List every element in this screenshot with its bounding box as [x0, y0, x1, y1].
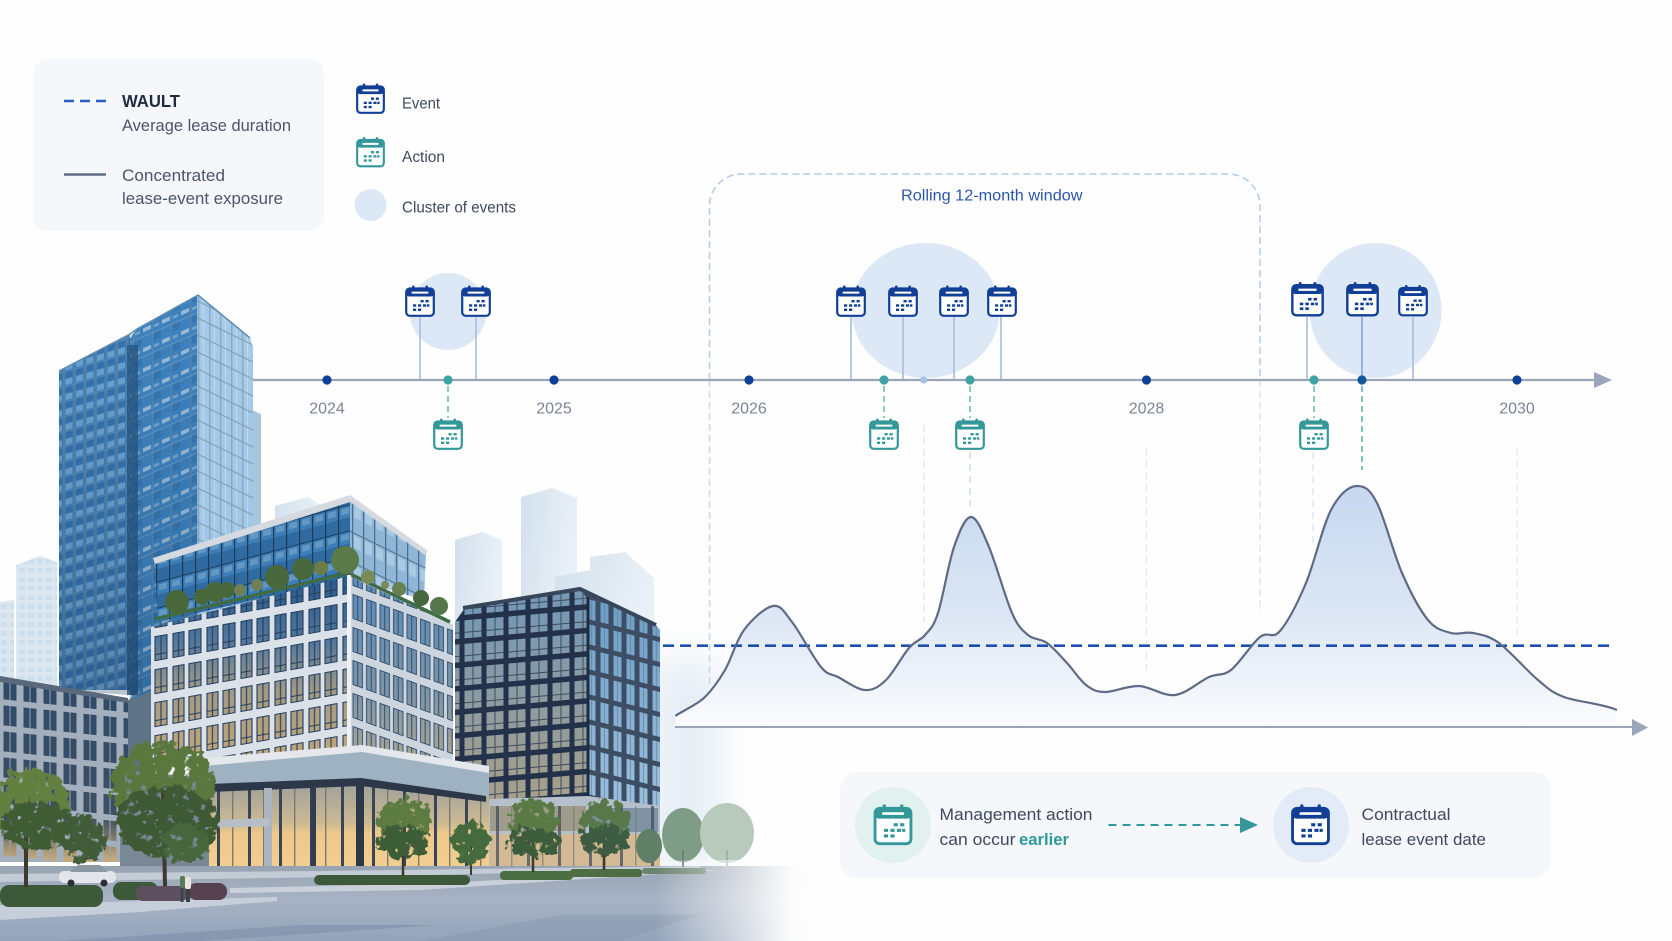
exposure chart	[663, 486, 1648, 736]
timeline year dots	[322, 375, 1522, 385]
callout text: contractual lease event date	[1362, 805, 1486, 849]
rolling 12-month window bracket	[710, 174, 1260, 688]
hedges	[0, 868, 706, 907]
car	[59, 865, 116, 886]
podium with shopfronts	[120, 745, 489, 868]
faint vertical guides to chart	[924, 425, 1517, 670]
legend label: action: Action	[402, 149, 445, 166]
legend text: WAULT: WAULT	[122, 91, 180, 111]
year labels: 2030	[1499, 400, 1535, 418]
event stems	[420, 317, 1413, 380]
action stems	[448, 386, 1362, 470]
legend icon: event	[357, 84, 384, 113]
callout text: management action	[940, 805, 1092, 849]
year labels: 2025	[536, 400, 572, 418]
legend panel: line styles	[33, 59, 324, 231]
legend: WAULT dashed line	[64, 100, 107, 102]
timeline arrowhead	[1594, 372, 1612, 388]
legend text: concentrated lease-event exposure	[122, 166, 283, 208]
timeline action dots	[443, 375, 1319, 385]
event icons	[406, 282, 1427, 316]
exposure area fill	[676, 486, 1617, 727]
year labels	[309, 400, 1535, 418]
illustration: city office buildings	[0, 295, 815, 941]
ground and road	[0, 866, 815, 941]
cluster circles	[410, 243, 1442, 378]
mid-rise building upper glass floors	[153, 495, 428, 622]
distant skyline buildings	[0, 488, 720, 870]
exposure curve	[676, 486, 1617, 716]
WAULT dashed line	[663, 644, 1615, 647]
callout text: contractual lease event date: Contractual	[1362, 805, 1450, 824]
fade to white	[655, 860, 815, 941]
callout icon: action in circle	[855, 787, 931, 863]
legend icon: cluster	[354, 189, 386, 221]
legend: exposure solid line	[64, 173, 106, 176]
legend label: cluster of events: Cluster of events	[402, 200, 516, 216]
year labels: 2024	[309, 400, 345, 418]
callout text: contractual lease event date: lease event date	[1362, 830, 1486, 849]
legend label: event: Event	[402, 96, 441, 112]
low left building	[0, 676, 154, 862]
callout text: management action: can occur	[940, 830, 1016, 849]
legend icon: action	[357, 137, 384, 166]
callout icon: event in circle	[1273, 787, 1349, 863]
legend text: concentrated lease-event exposure: Concentrated	[122, 166, 225, 185]
chart x axis	[675, 719, 1648, 736]
glass tower	[59, 295, 261, 700]
mid-rise building main facade	[151, 573, 453, 768]
legend text: average lease duration: Average lease duration	[122, 116, 291, 135]
trees	[0, 741, 754, 887]
legend text: concentrated lease-event exposure: lease-event exposure	[122, 189, 283, 208]
callout text: management action: earlier	[1019, 830, 1069, 849]
year labels: 2028	[1129, 400, 1164, 418]
rolling window label: Rolling 12-month window	[901, 188, 1083, 204]
timeline axis	[253, 372, 1612, 388]
year labels: 2026	[731, 400, 767, 418]
callout text: management action: Management action	[940, 805, 1092, 824]
bottom callout panel	[840, 772, 1551, 878]
legend: icon key	[354, 84, 516, 221]
callout dashed arrow	[1108, 817, 1258, 833]
pedestrians	[180, 876, 191, 902]
action icons	[434, 418, 1328, 449]
dark right building	[455, 589, 660, 866]
rooftop trees	[165, 546, 448, 615]
